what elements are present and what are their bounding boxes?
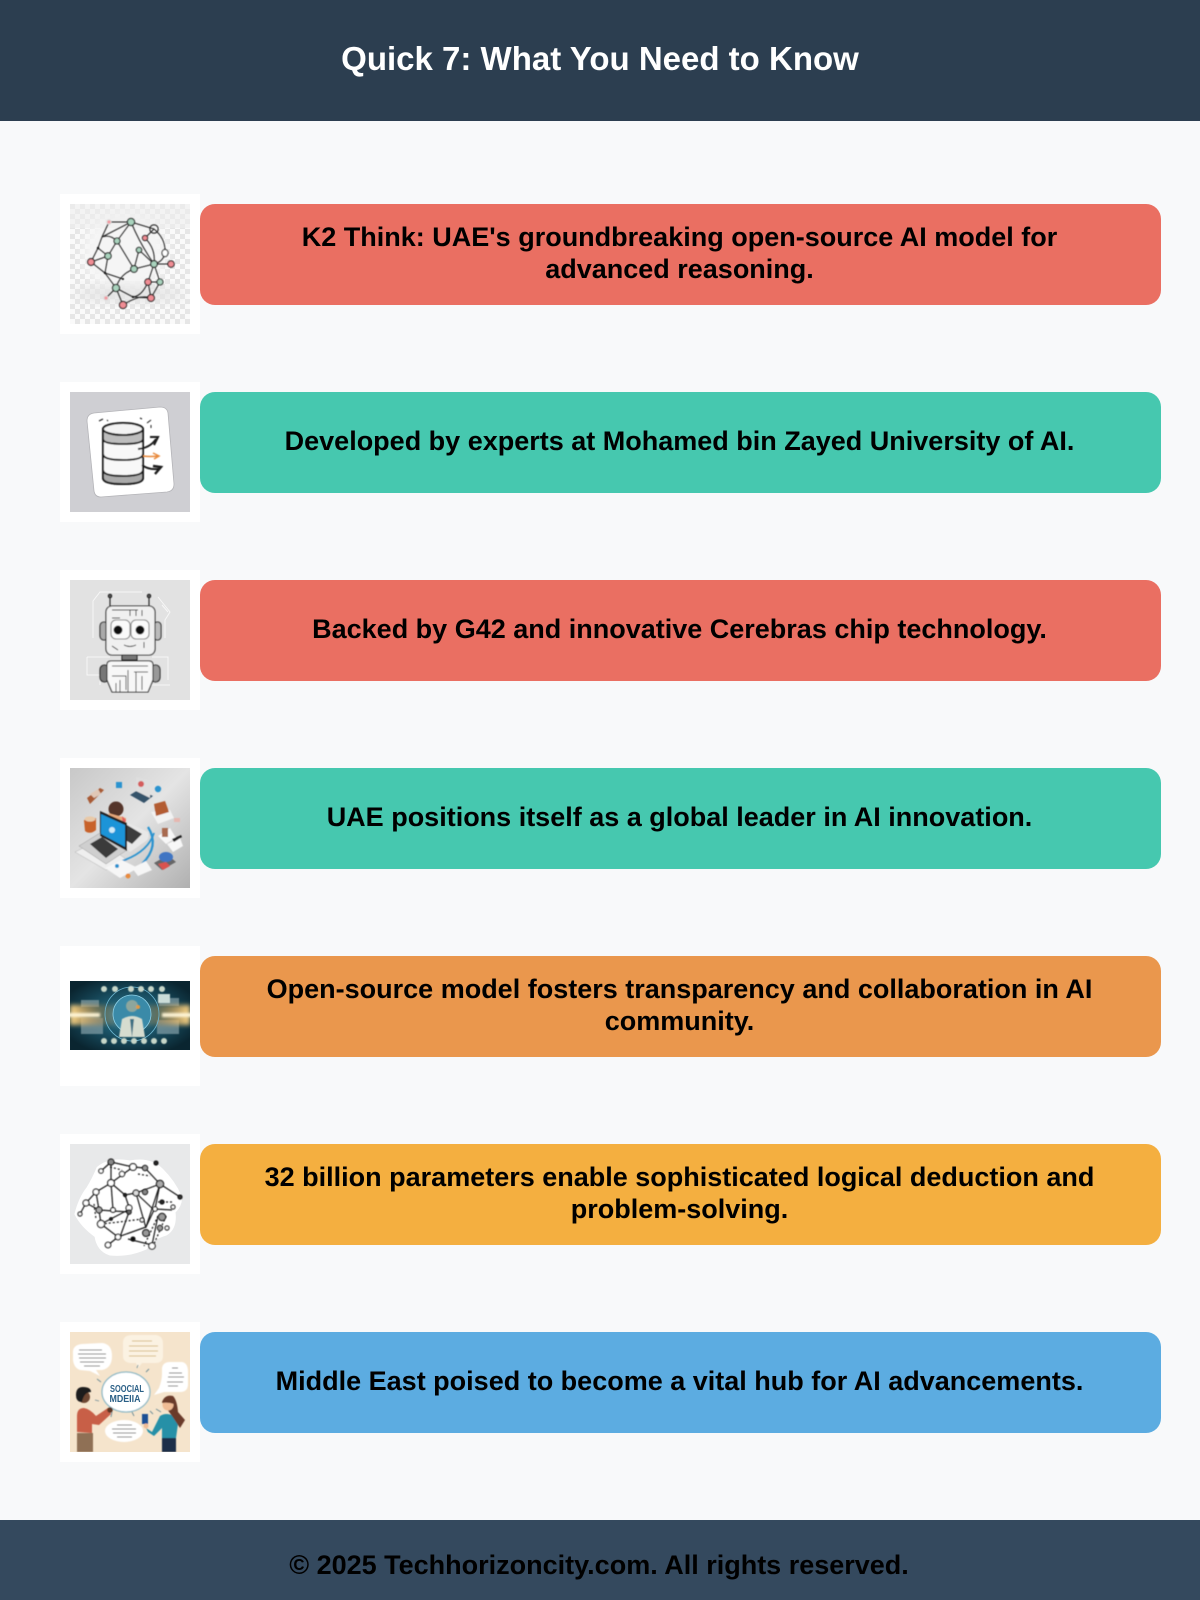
footer band	[0, 1520, 1200, 1600]
text card: item 4: UAE positions itself as a global leader in AI innovation.	[327, 802, 1032, 832]
icon: two people discussing social media	[60, 1322, 200, 1462]
panel: item 2	[70, 392, 1161, 512]
icon: robot with circuit lines	[60, 570, 200, 710]
text card: item 6: 32 billion parameters enable sophisticated logical deduction and problem-solving.	[265, 1162, 1094, 1224]
text card: item 5: Open-source model fosters transparency and collaboration in AI community.	[267, 974, 1092, 1036]
text card: item 2	[200, 392, 1161, 493]
header band	[0, 0, 1200, 121]
icon: isometric laptop and person	[60, 758, 200, 898]
icon text: social media: SOOCIAL	[110, 1384, 144, 1395]
icon: network sticker	[60, 1134, 200, 1274]
text card: item 3	[200, 580, 1161, 681]
text card: item 1	[200, 204, 1161, 305]
text card: item 1: K2 Think: UAE's groundbreaking open-source AI model for advanced reasoning.	[302, 222, 1057, 284]
text card: item 5	[200, 956, 1161, 1057]
text card: item 6	[200, 1144, 1161, 1245]
icon text: social media: MDEIIA	[110, 1394, 140, 1405]
panel: item 7	[70, 1332, 1161, 1452]
text card: item 4	[200, 768, 1161, 869]
icon: database cylinder with arrows	[60, 382, 200, 522]
panel: item 5	[70, 956, 1161, 1057]
panel: item 4	[70, 768, 1161, 888]
panel: item 3	[70, 580, 1161, 700]
text card: item 7	[200, 1332, 1161, 1433]
text card: item 3: Backed by G42 and innovative Cerebras chip technology.	[312, 614, 1047, 644]
title: Quick 7: What You Need to Know	[341, 40, 859, 77]
panel: item 6	[70, 1144, 1161, 1264]
icon: digital doctor hologram banner	[70, 981, 190, 1050]
panel: item 1	[70, 204, 1161, 324]
icon: network graph on checkerboard	[60, 194, 200, 334]
text card: item 2: Developed by experts at Mohamed bin Zayed University of AI.	[285, 426, 1074, 456]
text card: item 7: Middle East poised to become a vital hub for AI advancements.	[276, 1366, 1083, 1396]
copyright text: © 2025 Techhorizoncity.com. All rights reserved.	[289, 1550, 909, 1580]
icon text: social media	[110, 1384, 144, 1405]
